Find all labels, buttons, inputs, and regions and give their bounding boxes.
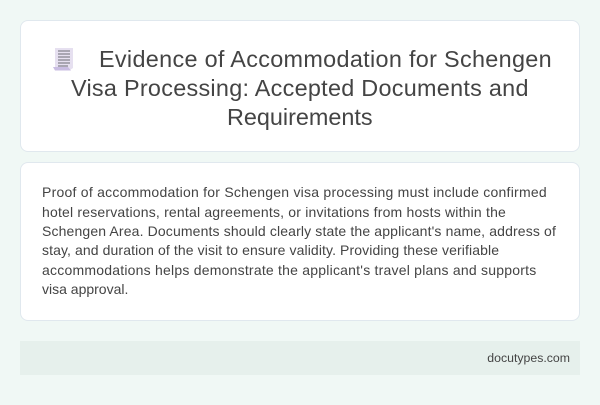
title [71, 46, 552, 130]
text block: description: hotel reservations, rental agreements, or invitations from hosts within the [42, 204, 506, 220]
panel: title card [20, 20, 580, 152]
footer bar [20, 341, 580, 375]
text block: description: stay, and duration of the visit to ensure validity. Providing these verifiable [42, 242, 499, 258]
text block: description: Proof of accommodation for Schengen visa processing must include confirmed [42, 184, 547, 200]
panel: description card [20, 162, 580, 321]
text block: description [42, 184, 556, 297]
title: Requirements [227, 104, 373, 130]
title: Evidence of Accommodation for Schengen [99, 46, 552, 72]
title: Visa Processing: Accepted Documents and [71, 75, 529, 101]
text block: description: visa approval. [42, 281, 128, 297]
text block: description: accommodations helps demonstrate the applicant's travel plans and supports [42, 262, 536, 278]
icon: document [53, 48, 73, 70]
footer text: docutypes.com [487, 351, 570, 365]
text block: description: Schengen Area. Documents should clearly state the applicant's name, address of [42, 223, 556, 239]
